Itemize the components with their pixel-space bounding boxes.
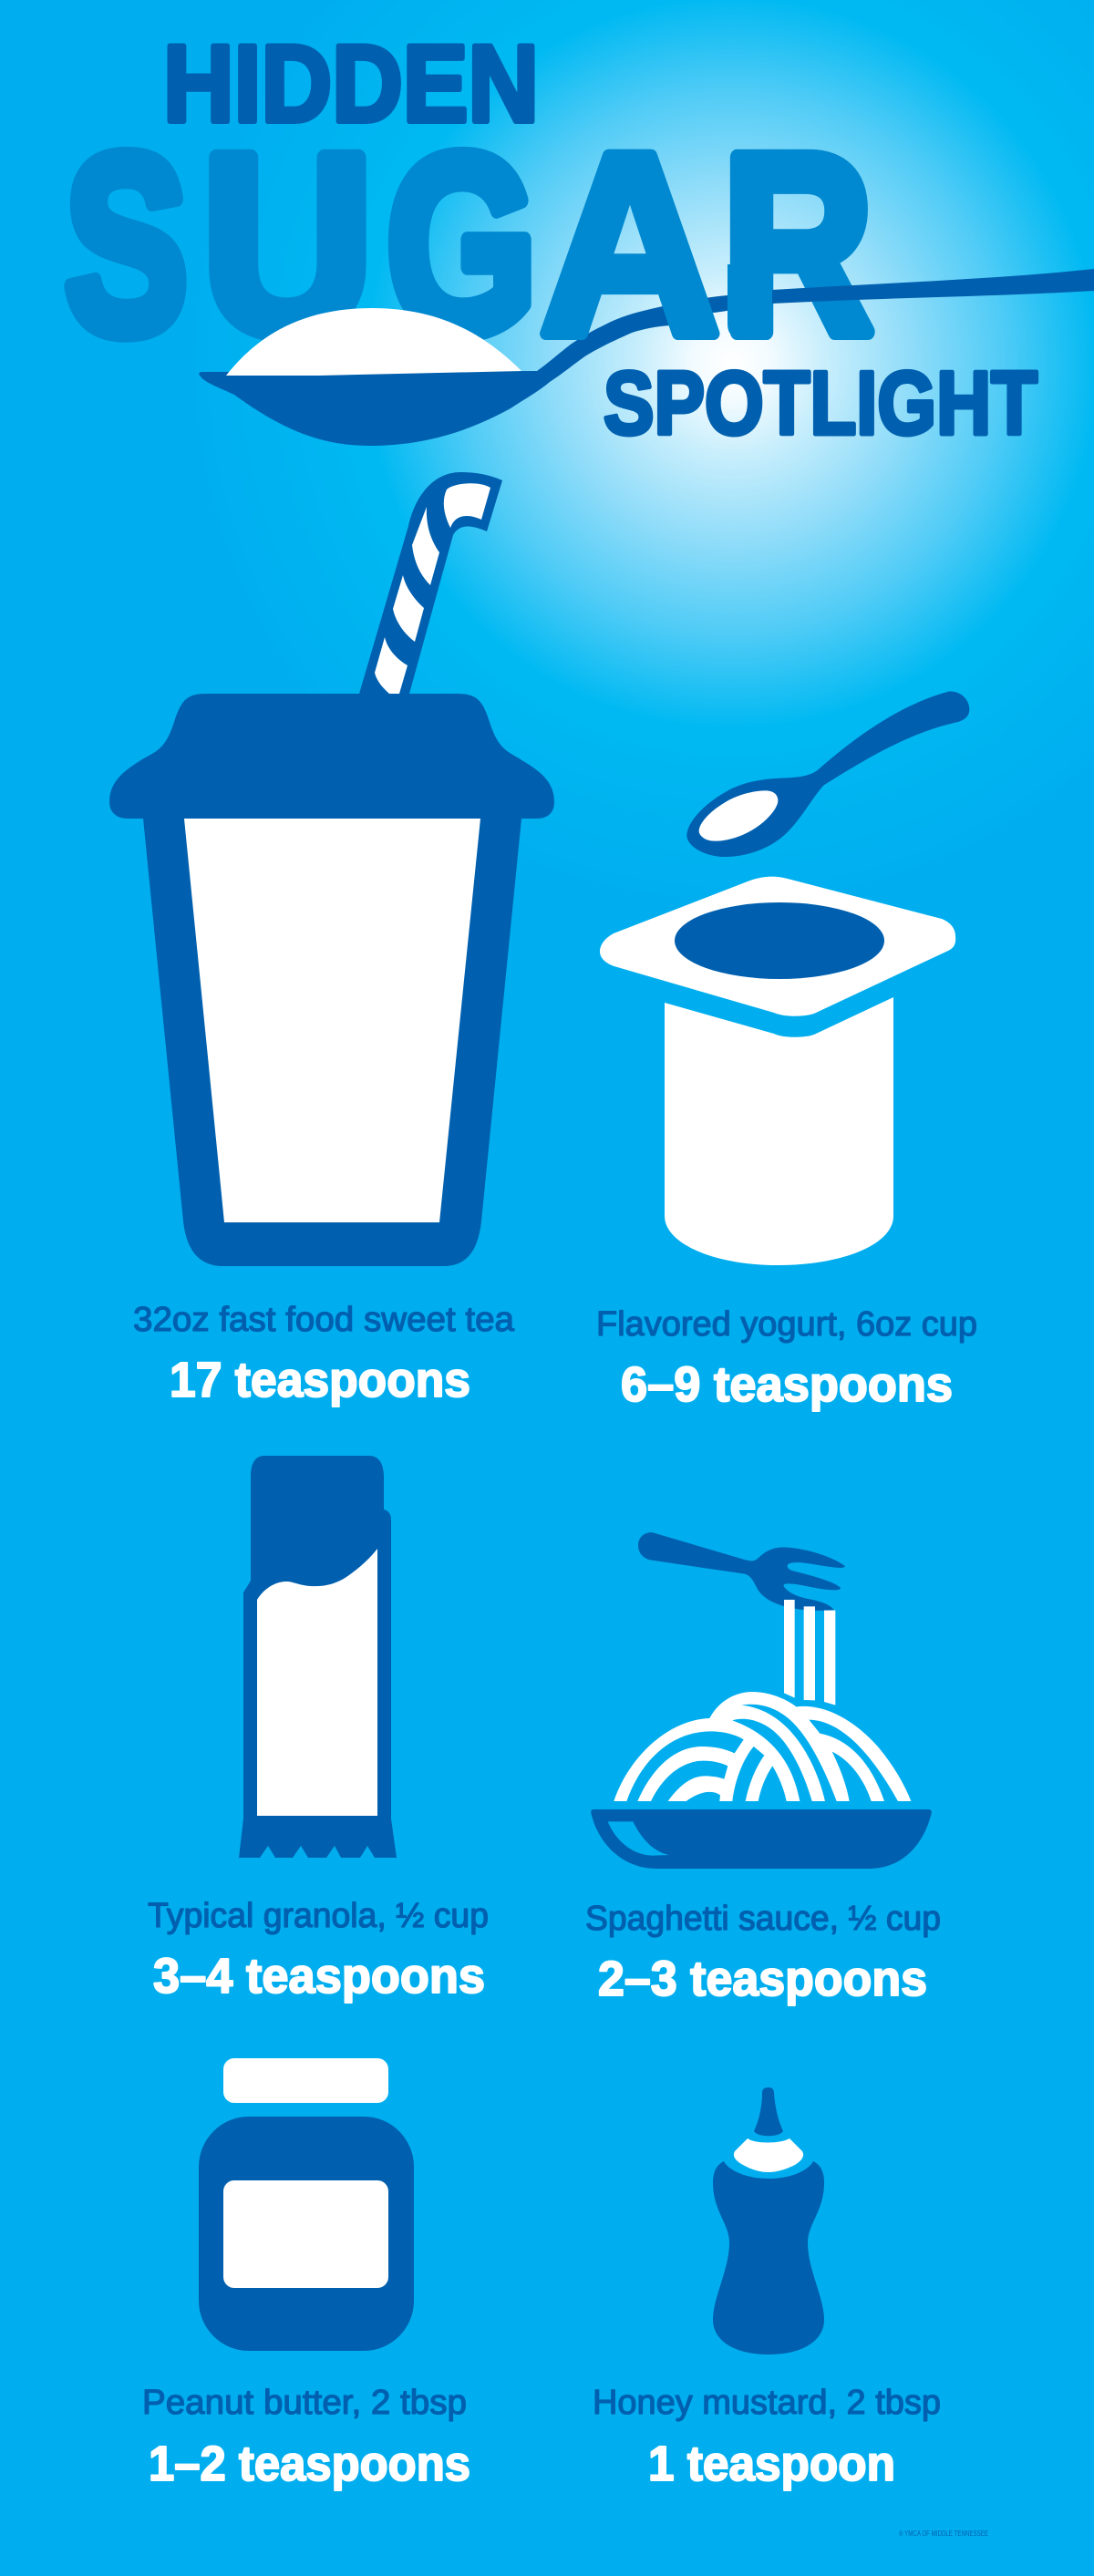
icon: peanut butter jar [199,2058,414,2351]
title: Sugar, first letters: U [202,102,373,386]
label: spaghetti sauce: Spaghetti sauce, ½ cup [585,1900,941,1938]
icon: yogurt spoon [686,691,969,857]
noodle pile [614,1692,911,1801]
title: Sugar, letter A over the spoon handle: A [540,100,720,389]
amount: honey mustard: 1 teaspoon [648,2437,895,2491]
amount: granola: 3–4 teaspoons [153,1949,485,2004]
credit line: ® YMCA OF MIDDLE TENNESSEE [899,2530,988,2538]
label: yogurt: Flavored yogurt, 6oz cup [596,1305,977,1344]
title: Sugar, first letters: S [65,102,188,386]
title: Sugar, first letters [65,102,872,386]
icon: fast food cup [109,694,554,1266]
bowl [591,1809,932,1869]
label: peanut butter: Peanut butter, 2 tbsp [142,2384,467,2422]
amount: yogurt: 6–9 teaspoons [621,1357,953,1412]
icon: sugar spoon [199,269,1094,446]
label: sweet tea: 32oz fast food sweet tea [133,1301,515,1339]
amount: sweet tea: 17 teaspoons [170,1353,470,1407]
title: Hidden: HIDDEN [163,23,539,145]
amount: peanut butter: 1–2 teaspoons [149,2437,470,2491]
title: Sugar, first letters: R [723,102,872,386]
amount: spaghetti sauce: 2–3 teaspoons [598,1952,927,2006]
label: granola: Typical granola, ½ cup [148,1897,489,1935]
label: honey mustard: Honey mustard, 2 tbsp [593,2384,941,2422]
icon: granola bar [239,1456,397,1858]
icon: spaghetti bowl and fork [591,1532,932,1869]
noodles hanging from fork [784,1600,835,1705]
icon: honey mustard bottle [713,2087,824,2354]
icon: striped straw [359,472,502,694]
icon: yogurt cup [600,877,955,1265]
icon: fork [638,1532,845,1611]
title: Sugar, first letters: G [387,102,537,386]
